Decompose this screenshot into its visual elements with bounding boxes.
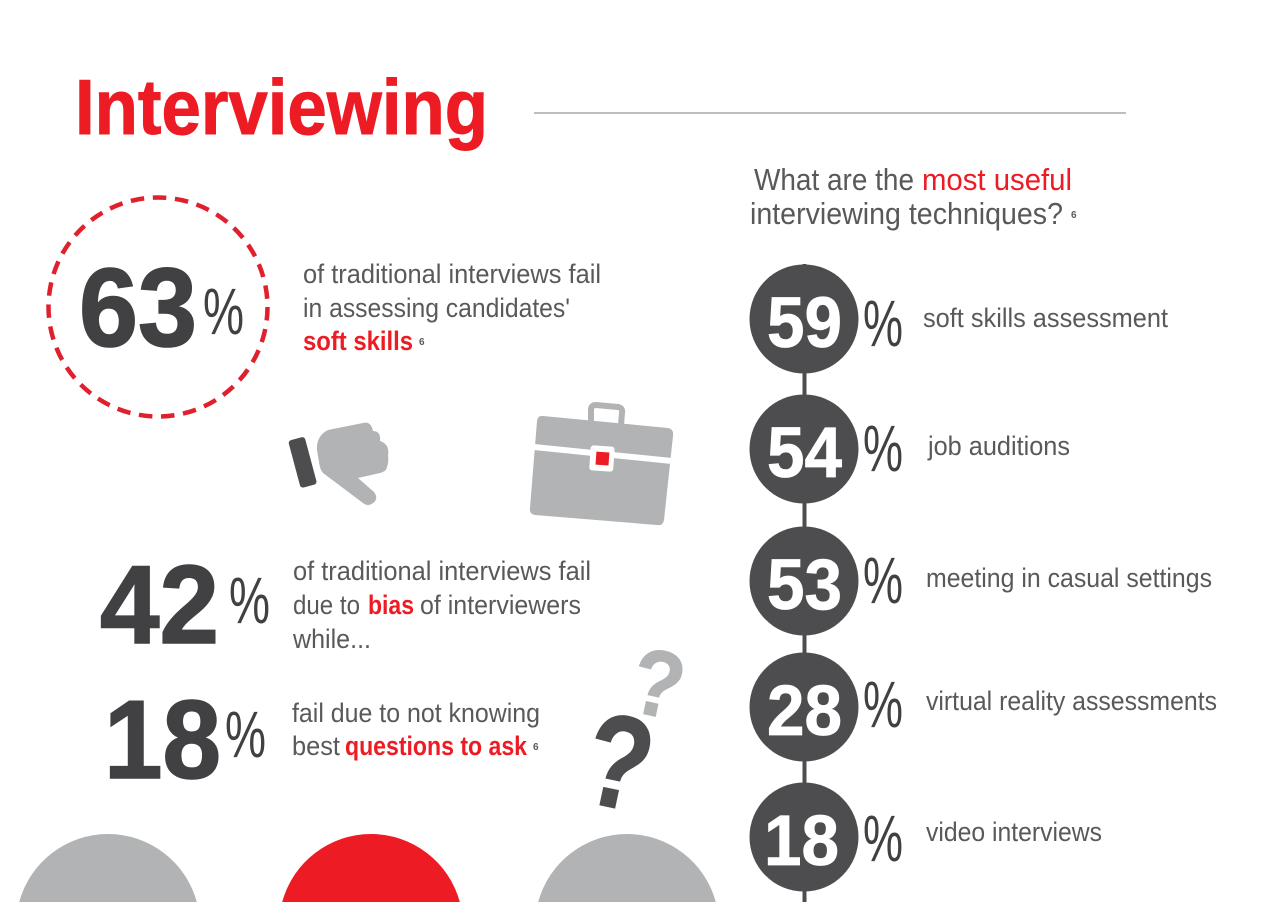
text: bias: bias (368, 590, 414, 620)
heading: most useful techniques (750, 162, 1077, 231)
text: bias: of traditional interviews fail (293, 556, 591, 586)
heading: most useful techniques: 6 (1071, 210, 1077, 221)
list item: 53% (750, 526, 1212, 636)
percent sign: % (229, 563, 270, 637)
text: bias (292, 556, 591, 654)
icon: briefcase (530, 405, 673, 525)
panel: 18% stat (104, 678, 540, 802)
panel: 63% stat (48, 198, 601, 416)
list item: 59%: soft skills assessment (923, 303, 1168, 333)
list item: 18%: video interviews (926, 817, 1102, 847)
list item: 28% (750, 652, 1217, 762)
list item: 18%: % (863, 801, 903, 875)
text: questions to ask: questions to ask (345, 731, 528, 761)
text: bias: of interviewers (420, 590, 581, 620)
text: questions to ask (292, 698, 540, 761)
dashed circle (48, 198, 268, 416)
text: questions to ask: best (292, 731, 340, 761)
text: soft skills: in assessing candidates' (303, 293, 570, 323)
list item: 53%: % (863, 543, 903, 617)
icon: question marks: ? (572, 684, 666, 841)
heading: most useful techniques: interviewing techniques? (750, 196, 1063, 231)
percent sign: % (203, 274, 244, 348)
decorative semicircles at bottom (19, 834, 716, 902)
list item: 28%: 28 (767, 672, 842, 751)
list item: 54%: job auditions (927, 431, 1070, 461)
text: bias: while... (292, 624, 371, 654)
panel: 42% stat (100, 543, 591, 667)
text: soft skills: 6 (419, 337, 425, 348)
text: soft skills (303, 259, 601, 356)
list item: 54% (750, 394, 1070, 504)
list item: 28%: % (863, 667, 903, 741)
list item: 54%: % (863, 411, 903, 485)
text: bias: due to (293, 590, 360, 620)
list item: 59%: % (863, 286, 903, 360)
heading: most useful techniques: What are the (754, 162, 914, 197)
list item: 18% (750, 782, 1102, 892)
text: soft skills: soft skills (303, 326, 413, 356)
list item: 59% (750, 264, 1168, 374)
list item: 18%: 18 (764, 802, 839, 881)
text: questions to ask: fail due to not knowing (292, 698, 540, 728)
list item: 54%: 54 (767, 414, 842, 493)
percent sign: % (225, 697, 266, 771)
number: 63: 63 (79, 246, 197, 370)
heading: most useful techniques: most useful (922, 162, 1072, 197)
number: 18: 18 (104, 678, 221, 802)
icon: question marks (572, 627, 694, 841)
list item: 53%: 53 (767, 546, 842, 625)
vertical timeline line (802, 264, 806, 902)
text: questions to ask: 6 (533, 742, 539, 753)
list item: 28%: virtual reality assessments (926, 686, 1217, 716)
icon: thumbs down (288, 423, 388, 505)
list item: 59%: 59 (767, 284, 842, 363)
title: Interviewing (75, 63, 488, 151)
number: 42: 42 (100, 543, 219, 667)
text: soft skills: of traditional interviews fail (303, 259, 601, 289)
icon: question marks: ? (622, 627, 694, 740)
list item: 53%: meeting in casual settings (926, 563, 1212, 593)
